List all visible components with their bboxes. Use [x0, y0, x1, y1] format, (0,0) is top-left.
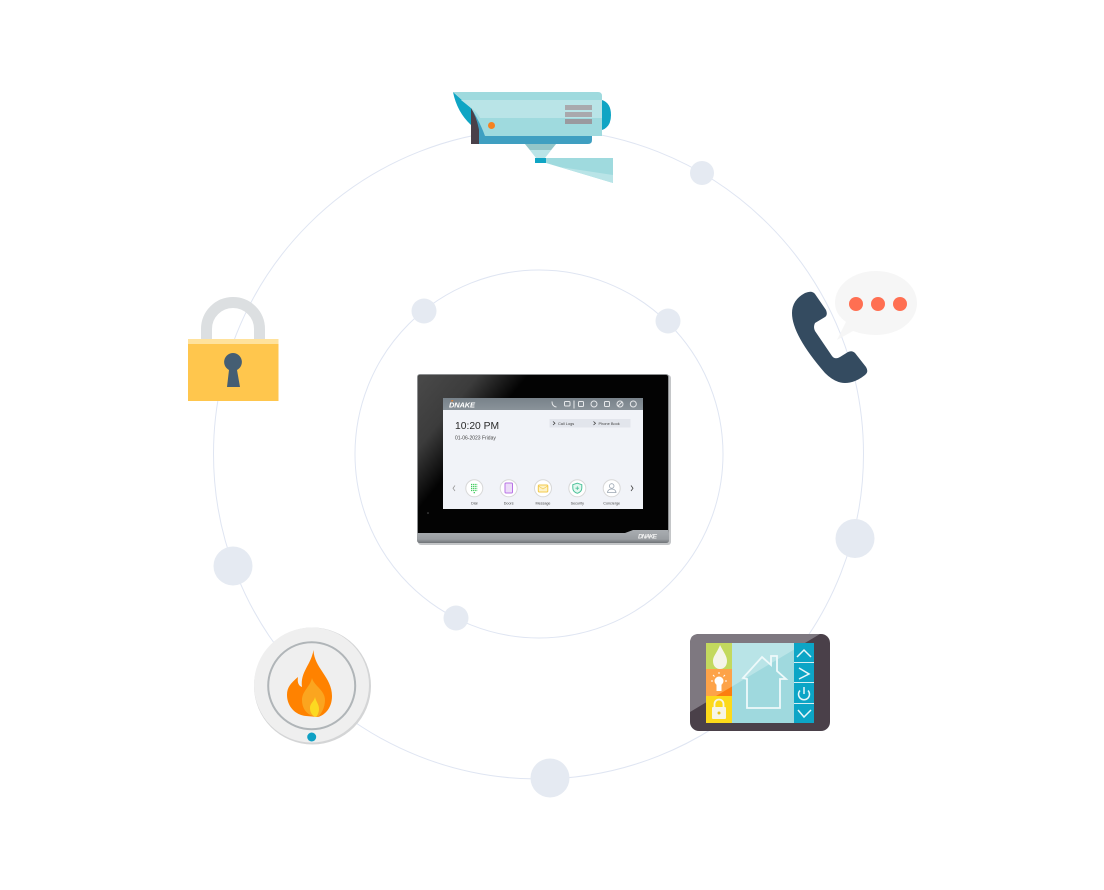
app labels: Doors — [504, 502, 514, 506]
icon: security camera — [453, 92, 613, 183]
app labels: Security — [571, 502, 584, 506]
header logo: DNAKE — [449, 400, 476, 410]
shortcut bar — [550, 419, 630, 428]
bottom logo: DNAKE — [638, 534, 658, 540]
central device: indoor monitor — [417, 374, 671, 545]
app icons — [453, 480, 633, 497]
orbit rings — [214, 129, 864, 779]
screen: 01-06-2023 Friday — [455, 436, 496, 442]
icon: fire alarm — [254, 628, 371, 744]
app labels: Concierge — [603, 502, 620, 506]
icon: phone with speech bubble — [792, 271, 917, 383]
app labels — [471, 502, 620, 506]
screen — [443, 398, 643, 509]
app labels: Dial — [471, 502, 478, 506]
house outline — [743, 656, 786, 708]
speech bubble — [835, 271, 917, 340]
icon: padlock — [188, 302, 278, 401]
control chevrons — [797, 650, 811, 717]
screen: Phone Book — [598, 421, 620, 426]
orbit dots — [214, 161, 874, 798]
bulb icon — [711, 672, 727, 691]
lock icon — [712, 700, 726, 719]
screen header — [443, 398, 643, 410]
screen: Call Logs — [558, 421, 574, 426]
app labels: Message — [536, 502, 550, 506]
clock: 10:20 PM — [455, 421, 499, 432]
header icons — [552, 400, 636, 408]
icon: smart home control panel — [690, 634, 830, 731]
drop icon — [713, 645, 727, 669]
